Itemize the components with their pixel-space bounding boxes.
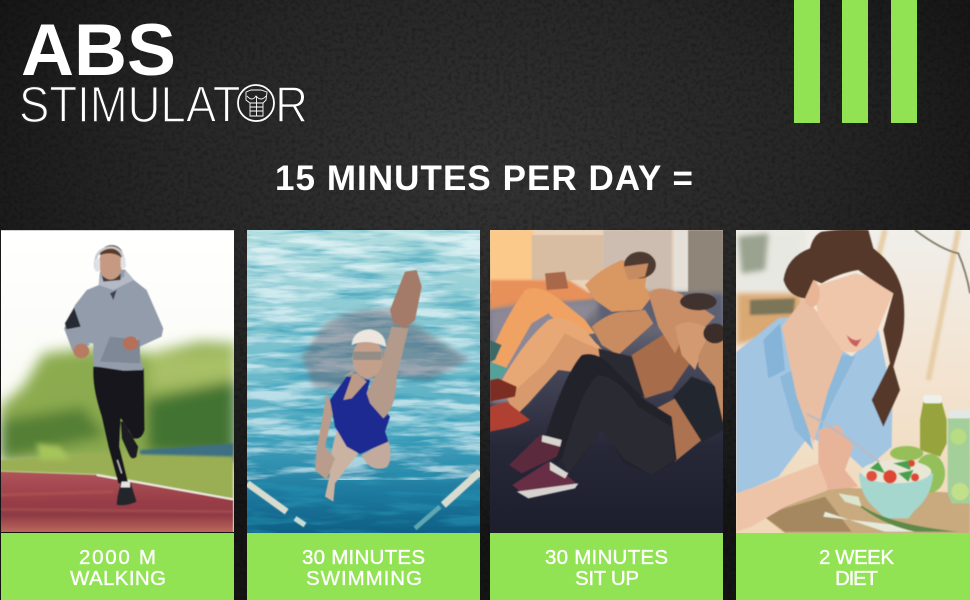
front woman torso xyxy=(650,393,702,462)
shoes: back row xyxy=(490,340,502,362)
hair xyxy=(783,229,904,427)
table xyxy=(760,487,970,533)
runner shoes xyxy=(121,421,138,459)
dark surface reflection around swimmer xyxy=(302,308,470,390)
label bar: 30 minutes sit up: SIT UP xyxy=(575,567,639,590)
middle torso xyxy=(632,333,693,398)
label bar: 2000 m walking xyxy=(1,533,234,600)
apples xyxy=(890,446,923,461)
runner hoodie xyxy=(64,269,163,371)
label bar: 30 minutes swimming: SWIMMING xyxy=(306,567,422,590)
gym wall and shelf xyxy=(490,230,673,293)
panel: swimming xyxy=(247,230,480,600)
runner hands xyxy=(73,344,89,358)
arm xyxy=(737,463,828,532)
green onions xyxy=(823,512,958,532)
lane ropes xyxy=(247,483,287,512)
label bar: 2000 m walking: WALKING xyxy=(70,567,166,590)
panel: walking xyxy=(0,230,237,600)
label bar: 2 week diet: 2 WEEK xyxy=(819,546,894,569)
back-row legs xyxy=(492,288,595,370)
panel: diet xyxy=(736,229,970,600)
front woman legs xyxy=(545,354,677,475)
logo: ABS Stimulator xyxy=(19,10,308,133)
salad xyxy=(861,460,931,483)
middle legs xyxy=(505,333,605,417)
label bar: 30 minutes swimming xyxy=(247,533,480,600)
face xyxy=(813,273,893,352)
shirt xyxy=(737,317,892,493)
swimmer raised arm xyxy=(367,327,408,418)
decorative bars: three green stripes xyxy=(794,0,917,123)
photo: woman eating salad xyxy=(736,229,970,533)
photo: group doing sit ups in gym xyxy=(490,230,727,533)
jars xyxy=(920,402,947,457)
runner head xyxy=(99,252,122,280)
photo: runner on track xyxy=(0,230,237,533)
label bar: 2 week diet xyxy=(736,533,970,600)
swimmer left arm xyxy=(315,393,335,480)
photo: swimmer in pool xyxy=(247,230,480,533)
label bar: 2000 m walking: 2000 M xyxy=(79,546,156,569)
back-row torso and arms xyxy=(592,310,653,355)
logo word: ABS: ABS xyxy=(21,10,176,91)
runner legs xyxy=(93,367,145,483)
bowl xyxy=(859,473,933,518)
background shelf and plants xyxy=(737,230,805,293)
shoes: front row xyxy=(509,435,562,473)
swimmer legs xyxy=(325,430,358,502)
label bar: 30 minutes sit up xyxy=(490,533,723,600)
heading: 15 MINUTES PER DAY = xyxy=(275,159,693,198)
logo word: Stimulator: STIMULATOR xyxy=(19,76,308,133)
swimmer head and cap xyxy=(353,338,383,378)
weights xyxy=(545,272,568,290)
label bar: 2 week diet: DIET xyxy=(835,567,878,590)
icon: abdominal torso in circle xyxy=(238,85,274,121)
label bar: 30 minutes swimming: 30 MINUTES xyxy=(302,546,425,569)
label bar: 30 minutes sit up: 30 MINUTES xyxy=(545,546,668,569)
chest and neck xyxy=(782,297,845,443)
swimmer torso xyxy=(330,377,390,454)
panel: sit ups xyxy=(490,230,727,600)
